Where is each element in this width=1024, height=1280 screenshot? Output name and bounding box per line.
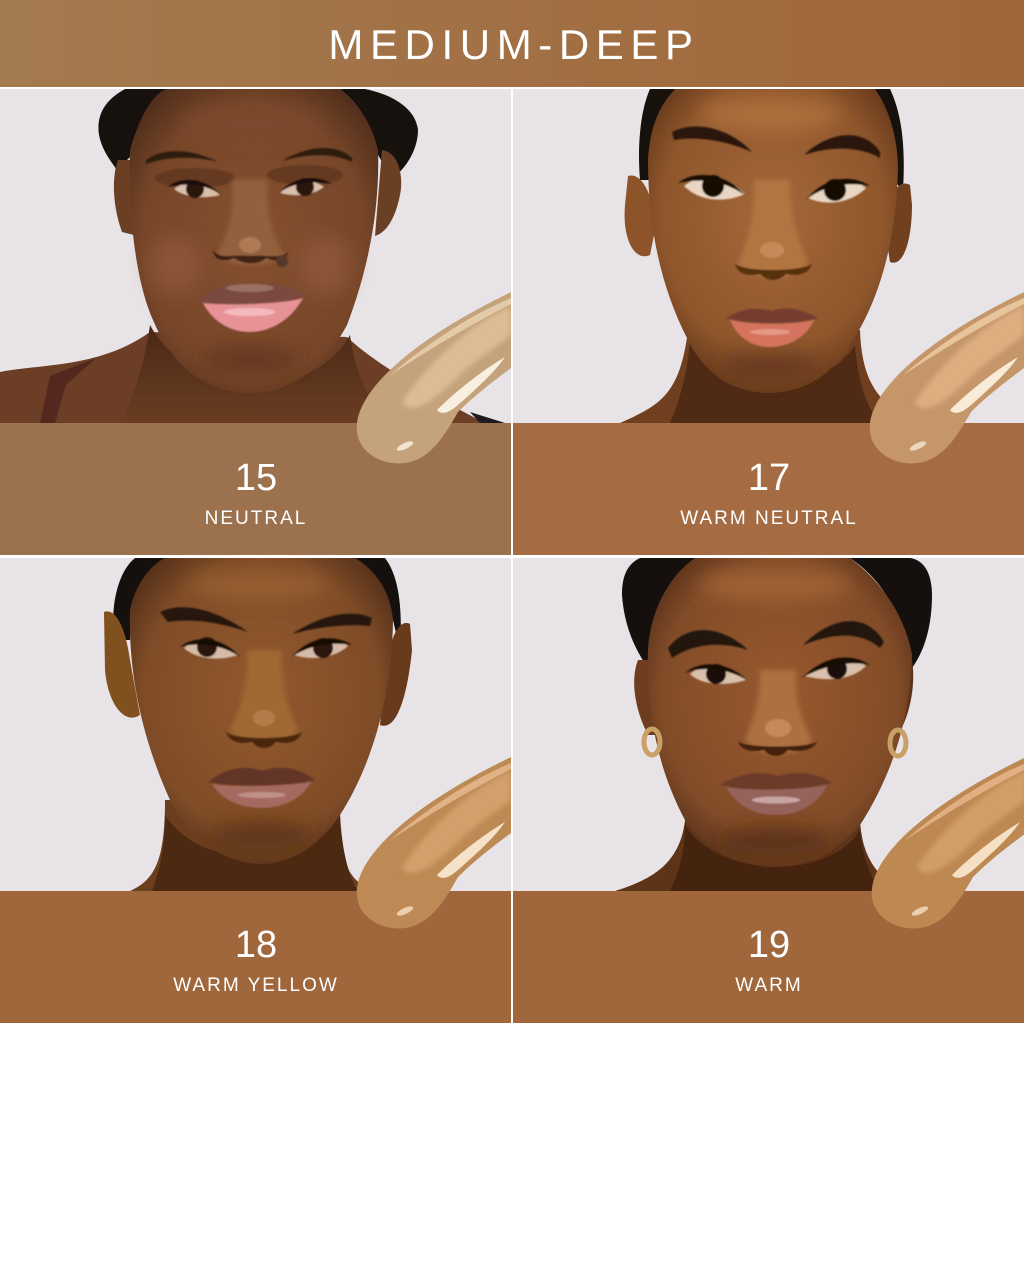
portrait: shade 19	[513, 558, 1024, 891]
portrait: shade 17	[513, 89, 1024, 423]
earrings	[644, 729, 906, 756]
swatch	[870, 292, 1024, 463]
shade number: 17	[748, 457, 790, 499]
shade name: NEUTRAL	[205, 508, 307, 529]
swatch	[357, 292, 511, 463]
title: MEDIUM-DEEP	[328, 21, 700, 68]
panel: shade 15 neutral	[0, 89, 511, 555]
header banner	[0, 0, 1024, 87]
portrait: shade 15	[0, 89, 511, 423]
shade number: 18	[235, 924, 277, 966]
colour band	[0, 891, 511, 1023]
panel: shade 17 warm neutral	[513, 89, 1024, 555]
shade number: 15	[235, 457, 277, 499]
swatch	[357, 757, 511, 928]
shade name: WARM NEUTRAL	[680, 508, 858, 529]
portrait: shade 18	[0, 558, 511, 891]
shade name: WARM	[735, 975, 803, 996]
colour band	[513, 891, 1024, 1023]
swatch	[872, 757, 1024, 928]
shade number: 19	[748, 924, 790, 966]
panel: shade 18 warm yellow	[0, 558, 511, 1023]
shade name: WARM YELLOW	[173, 975, 339, 996]
panel: shade 19 warm	[513, 558, 1024, 1023]
colour band	[513, 423, 1024, 555]
colour band	[0, 423, 511, 555]
